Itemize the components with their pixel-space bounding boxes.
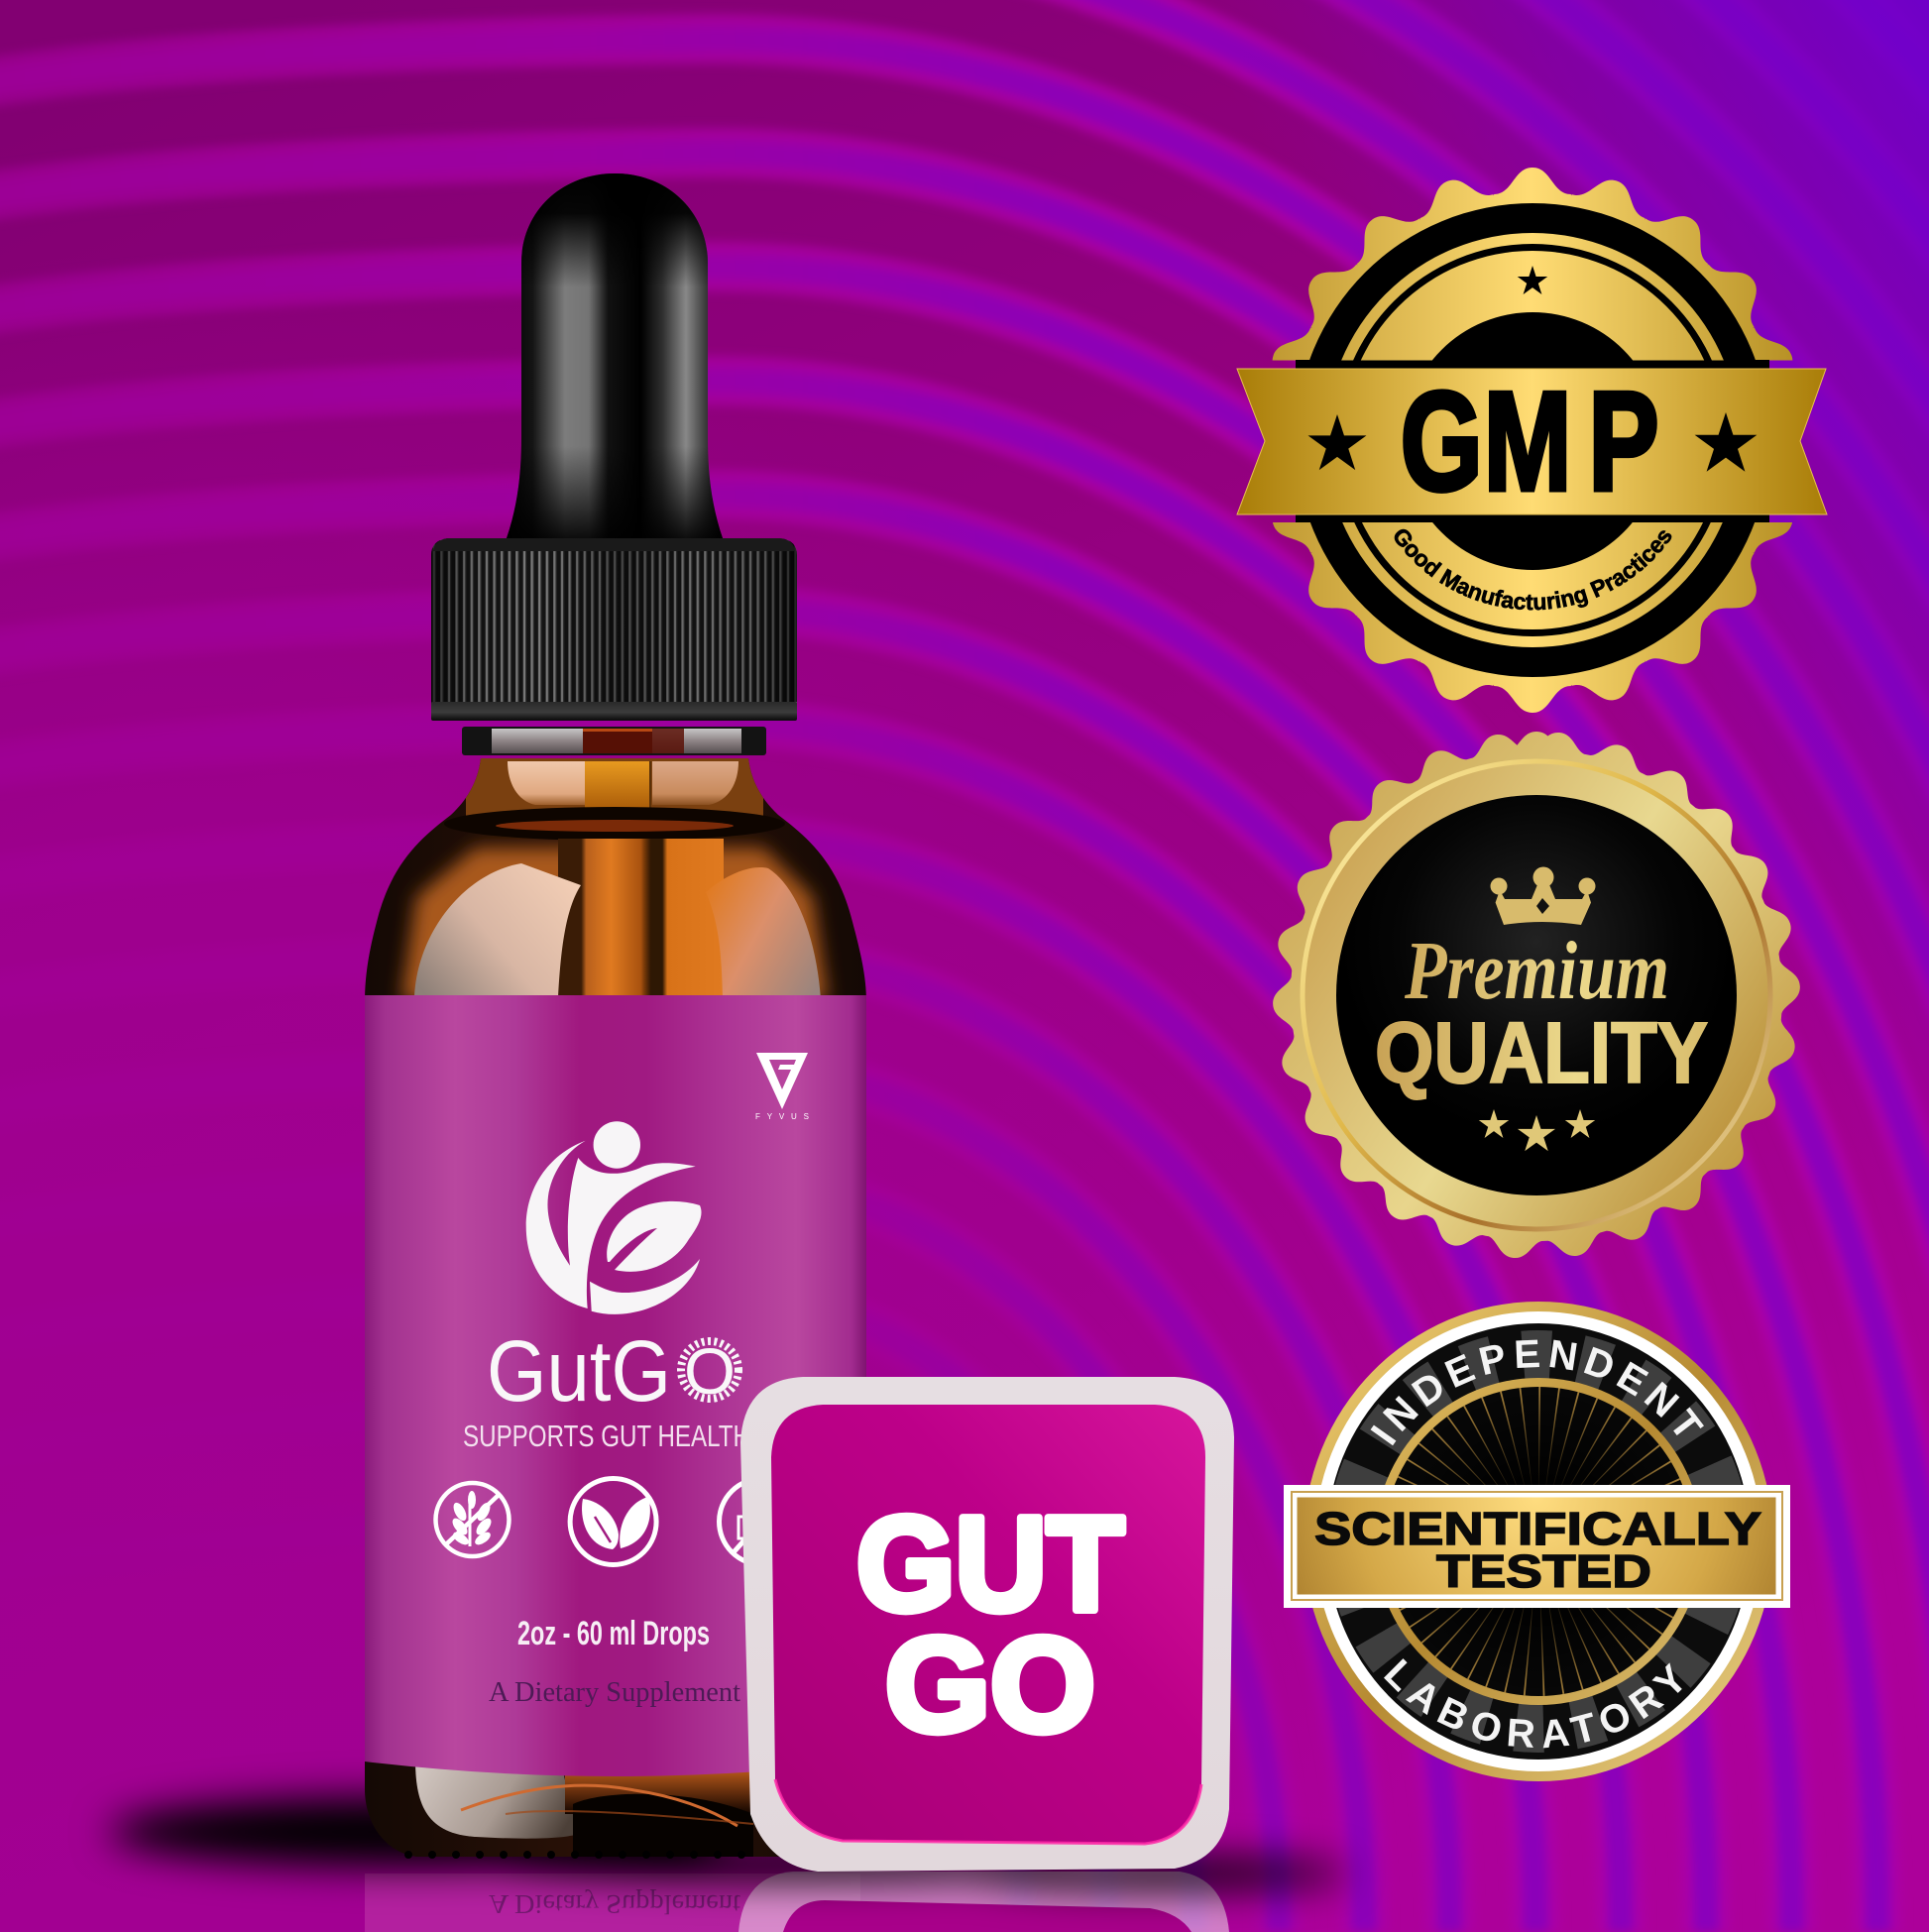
three stars <box>1479 1109 1595 1151</box>
tagline: SUPPORTS GUT HEALTH <box>463 1419 750 1453</box>
dropper bulb <box>507 173 723 538</box>
GMP word: GMP <box>1401 362 1659 520</box>
icon: natural leaves <box>570 1479 656 1564</box>
word Premium: Premium <box>1404 925 1669 1017</box>
label <box>365 995 866 1776</box>
icon: gluten free <box>436 1483 510 1556</box>
volume: 2oz - 60 ml Drops <box>517 1615 710 1652</box>
amber column <box>558 839 724 999</box>
curved text: Good Manufacturing Practices <box>1394 529 1671 611</box>
product cube: GUT GO <box>740 1377 1234 1872</box>
supplement line: A Dietary Supplement <box>489 1677 740 1708</box>
left highlight <box>414 863 581 999</box>
top star <box>1518 266 1547 294</box>
brand mark: FYVUS <box>755 1053 809 1121</box>
logo: person and leaf <box>526 1121 702 1314</box>
reflection on the floor <box>365 1872 1229 1932</box>
brand mark: FYVUS: FYVUS <box>755 1112 809 1121</box>
base glass <box>415 1766 573 1839</box>
text LABORATORY: LABORATORY <box>1384 1658 1682 1749</box>
ribbon stars <box>1308 412 1757 472</box>
crown <box>1491 866 1596 925</box>
product bottle <box>357 173 882 1874</box>
sunburst rays <box>1444 1447 1633 1636</box>
right highlight <box>706 867 821 999</box>
cube word GUT: GUT <box>856 1489 1124 1639</box>
cube word GO: GO <box>885 1610 1095 1760</box>
mirrored cube <box>738 1872 1229 1932</box>
banner line 2: TESTED <box>1436 1545 1651 1597</box>
badge: GMP <box>1236 168 1828 713</box>
badge: scientifically tested <box>1284 1302 1790 1781</box>
ribbed cap <box>431 538 797 721</box>
badge: premium quality <box>1269 729 1804 1264</box>
product name: GutG <box>487 1323 671 1420</box>
spokes <box>1352 1355 1725 1728</box>
glass body <box>357 753 882 1874</box>
word QUALITY: QUALITY <box>1375 1005 1708 1101</box>
liquid line <box>444 807 785 841</box>
collar <box>462 727 766 755</box>
product name: O <box>684 1334 736 1408</box>
ribbon <box>1237 369 1827 514</box>
mirrored label text: A Dietary Supplement <box>489 1889 741 1919</box>
banner <box>1284 1485 1790 1608</box>
base knurl <box>408 1851 763 1859</box>
neck amber <box>466 755 763 817</box>
icon: third symbol <box>720 1479 805 1564</box>
amber glow <box>401 848 828 1001</box>
banner line 1: SCIENTIFICALLY <box>1314 1503 1761 1554</box>
floor shadow <box>109 1796 1348 1888</box>
text INDEPENDENT: INDEPENDENT <box>1370 1340 1704 1445</box>
